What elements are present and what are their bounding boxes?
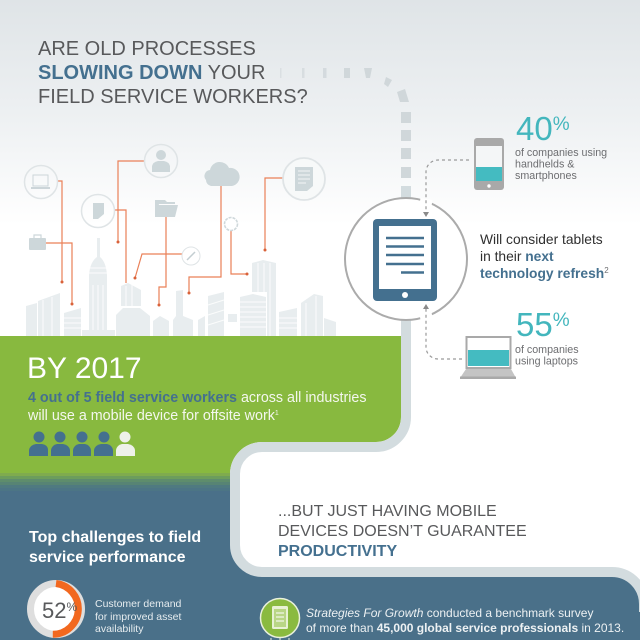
tablet statement (480, 232, 609, 281)
icon: gear (224, 218, 238, 230)
road path (235, 186, 640, 612)
icon: phone (474, 138, 504, 190)
icon: briefcase (29, 235, 46, 250)
building window detail (43, 263, 316, 336)
by 2017 text: 4 out of 5 field service workers across all industries (28, 390, 367, 406)
challenge text: for improved asset (95, 611, 181, 623)
stat: 55 percent: 55 (516, 306, 553, 343)
by 2017 text (27, 390, 367, 424)
title: ARE OLD PROCESSES (38, 38, 256, 60)
dashed arrow laptop to tablet (423, 304, 462, 359)
survey text: of more than 45,000 global service professionals in 2013. (306, 621, 624, 635)
stat: 55 percent: using laptops (515, 356, 578, 368)
road dashes fading (280, 68, 411, 178)
chart: 52 percent donut: % (66, 600, 77, 614)
chart: 52 percent donut (30, 584, 82, 634)
stat: 55 percent: % (553, 310, 570, 331)
stat: 40 percent: 40 (516, 110, 553, 147)
icon: report circle (283, 158, 325, 200)
survey text (306, 606, 624, 635)
heading: top challenges (29, 529, 201, 566)
tablet statement: 2 (604, 266, 609, 275)
heading: but just having mobile devices: ...BUT JUST HAVING MOBILE (278, 503, 497, 520)
heading: but just having mobile devices: PRODUCTIVITY (278, 543, 397, 560)
tablet statement: technology refresh (480, 266, 604, 281)
title: FIELD SERVICE WORKERS? (38, 86, 308, 108)
connector end dots (60, 240, 266, 306)
heading: but just having mobile devices (278, 503, 527, 560)
by 2017 text: 1 (275, 410, 279, 417)
stat: 40 percent: of companies using (515, 147, 607, 159)
icon: laptop circle (24, 166, 58, 198)
by 2017 text: will use a mobile device for offsite work (28, 408, 275, 424)
heading: but just having mobile devices: DEVICES DOESN’T GUARANTEE (278, 523, 527, 540)
icon row: 4 of 5 people (29, 432, 135, 456)
icon: folder (155, 200, 178, 217)
challenge text: availability (95, 623, 144, 635)
by 2017 heading: BY 2017 (27, 352, 142, 385)
heading: top challenges: service performance (29, 549, 186, 566)
dashed arrow phone to tablet (423, 160, 469, 217)
chart: 52 percent donut: 52 (42, 598, 66, 623)
icon: tablet (373, 219, 437, 301)
icon tree: orange connectors (45, 161, 283, 305)
icon: clipboard badge (260, 598, 300, 640)
title: SLOWING DOWN YOUR (38, 62, 265, 84)
stat: 40 percent: smartphones (515, 170, 577, 182)
panel: tablet circle (345, 198, 467, 320)
survey text: Strategies For Growth conducted a benchmark survey (306, 606, 593, 620)
icon: cloud (204, 162, 240, 186)
challenge text: Customer demand (95, 598, 182, 610)
heading: top challenges: Top challenges to field (29, 529, 201, 546)
challenge text (95, 598, 182, 635)
stat: 55 percent (515, 306, 579, 368)
icon: document circle (82, 194, 114, 228)
green banner (0, 336, 401, 500)
stat: 40 percent: % (553, 114, 570, 135)
icon: laptop (460, 337, 516, 379)
title (38, 38, 308, 108)
tablet statement: in their next (480, 249, 554, 264)
stat: 40 percent: handhelds & (515, 158, 574, 170)
stat: 55 percent: of companies (515, 344, 579, 356)
blue lower panel (0, 491, 640, 640)
green to blue stripes (0, 473, 232, 491)
stat: 40 percent (515, 110, 607, 182)
icon: wrench circle (182, 247, 200, 265)
background gradient (0, 0, 640, 225)
city skyline (26, 238, 336, 336)
tablet statement: Will consider tablets (480, 232, 603, 247)
icon: person circle (144, 144, 178, 178)
